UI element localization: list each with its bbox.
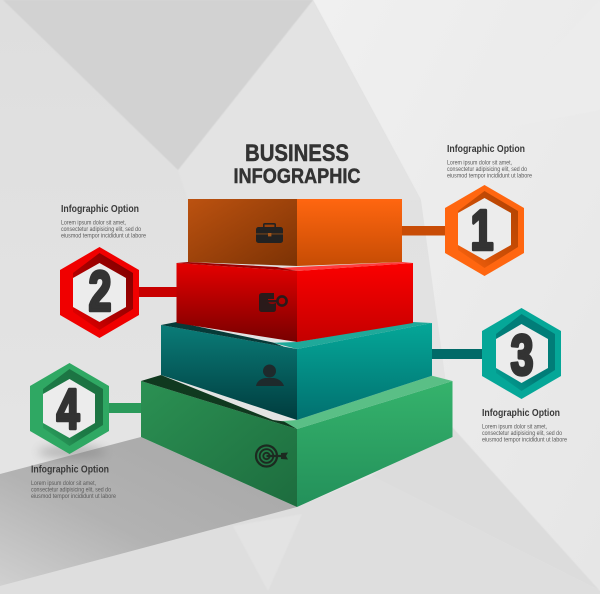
connector 2 bbox=[139, 287, 177, 297]
text block: option 1: eiusmod tempor incididunt ut labore bbox=[447, 174, 533, 180]
text block: option 2 bbox=[61, 204, 147, 240]
step 3: teal block bbox=[161, 322, 432, 420]
text block: option 4: consectetur adipisicing elit, sed do bbox=[31, 488, 112, 494]
text block: option 4: eiusmod tempor incididunt ut labore bbox=[31, 494, 117, 500]
title bbox=[234, 140, 360, 188]
hexagon badge 2 bbox=[60, 247, 139, 338]
number 3: 3 bbox=[511, 323, 533, 387]
connector 3 bbox=[432, 349, 482, 359]
text block: option 2: consectetur adipisicing elit, sed do bbox=[61, 227, 142, 233]
step 2: red block bbox=[176, 262, 413, 342]
text block: option 3: Infographic Option bbox=[482, 408, 560, 419]
text block: option 4: Infographic Option bbox=[31, 464, 109, 476]
text block: option 1: consectetur adipisicing elit, sed do bbox=[447, 167, 528, 173]
icon: target with dart bbox=[256, 446, 288, 466]
title: INFOGRAPHIC bbox=[234, 165, 360, 188]
text block: option 4: Lorem ipsum dolor sit amet, bbox=[31, 481, 96, 487]
text block: option 2: Lorem ipsum dolor sit amet, bbox=[61, 220, 126, 226]
step 4: green base block bbox=[141, 375, 452, 507]
text block: option 1: Lorem ipsum dolor sit amet, bbox=[447, 160, 512, 166]
text block: option 3: eiusmod tempor incididunt ut labore bbox=[482, 438, 568, 444]
text block: option 1: Infographic Option bbox=[447, 144, 525, 155]
title: BUSINESS bbox=[245, 140, 349, 167]
step 1: orange top block bbox=[188, 199, 402, 266]
number 1: 1 bbox=[471, 198, 493, 262]
connector 1 bbox=[402, 226, 445, 236]
icon: briefcase bbox=[256, 223, 283, 243]
text block: option 1 bbox=[447, 144, 533, 180]
text block: option 2: Infographic Option bbox=[61, 204, 139, 215]
text block: option 3: Lorem ipsum dolor sit amet, bbox=[482, 424, 547, 430]
hexagon badge 4 shadow bbox=[38, 446, 106, 458]
text block: option 3 bbox=[482, 408, 568, 444]
hexagon badge 3 bbox=[482, 308, 561, 399]
connector 4 bbox=[109, 403, 141, 413]
hexagon badge 4 bbox=[30, 363, 109, 454]
text block: option 4 bbox=[31, 464, 117, 500]
number 4: 4 bbox=[57, 377, 80, 441]
icon: person bbox=[256, 364, 284, 386]
hexagon badge 1 bbox=[445, 185, 524, 276]
pyramid cast shadow bbox=[0, 437, 297, 586]
text block: option 3: consectetur adipisicing elit, sed do bbox=[482, 431, 563, 437]
text block: option 2: eiusmod tempor incididunt ut labore bbox=[61, 234, 147, 240]
number 2: 2 bbox=[89, 259, 111, 323]
icon: key and lock bbox=[259, 293, 287, 312]
